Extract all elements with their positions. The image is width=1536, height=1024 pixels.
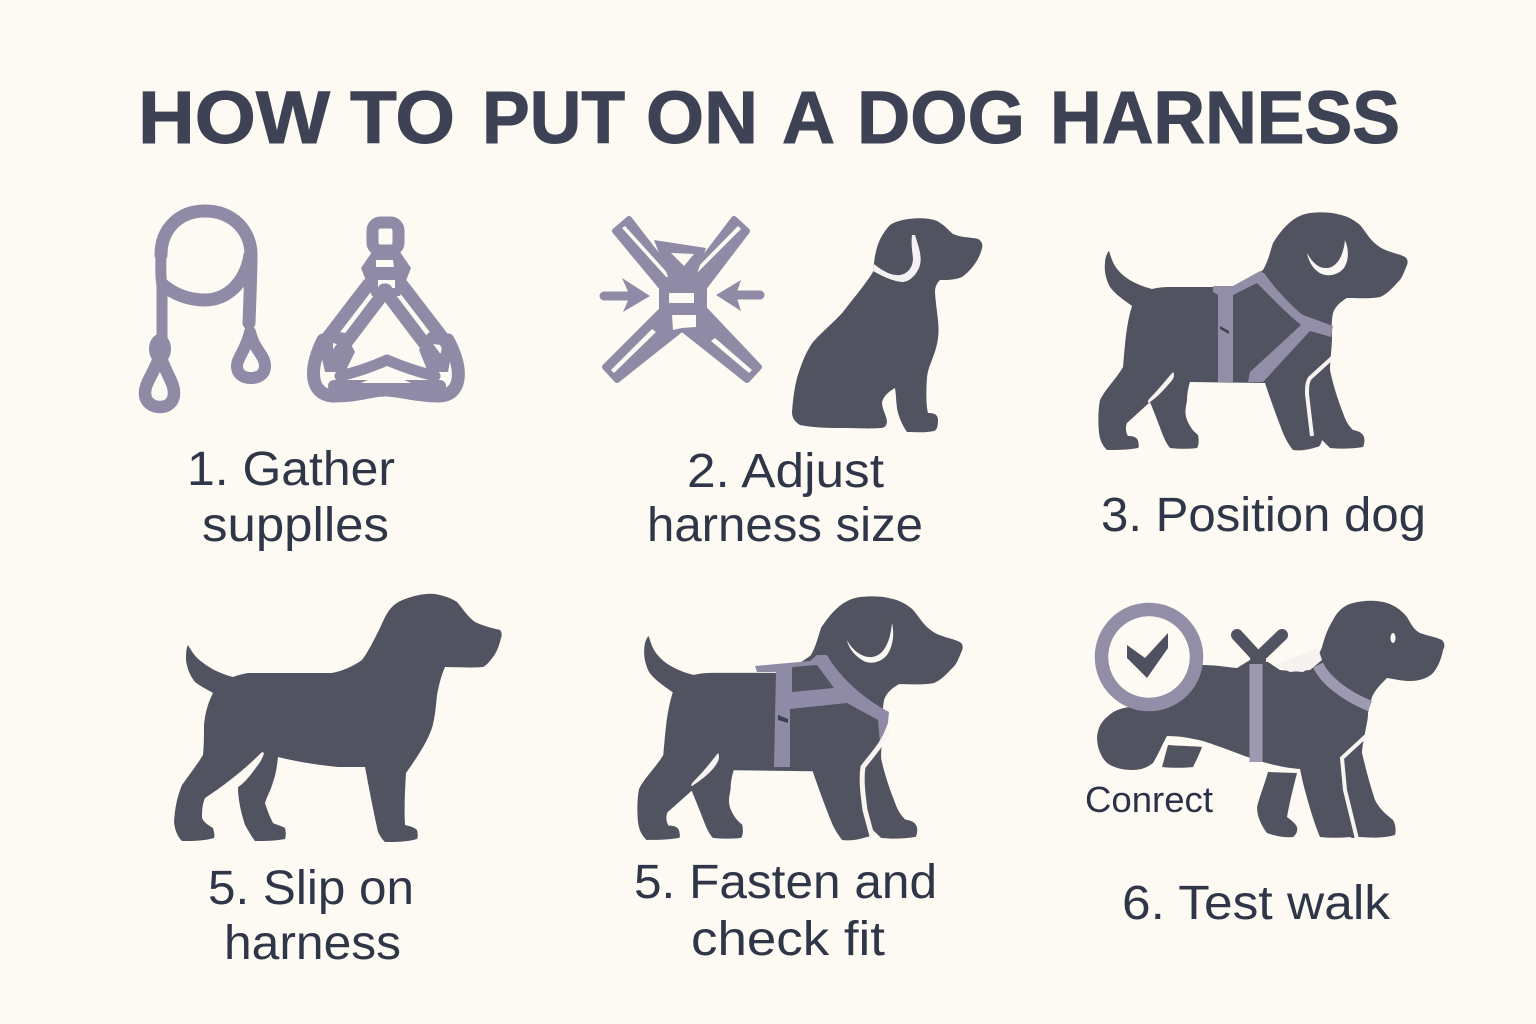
label: step 4: 5. Slip on bbox=[208, 862, 414, 915]
label: step 4 bbox=[208, 862, 414, 970]
label: step 1: supplles bbox=[202, 499, 389, 552]
title: ON bbox=[646, 76, 758, 159]
badge label: Conrect bbox=[1085, 779, 1213, 820]
title bbox=[138, 76, 1400, 159]
icon: walking dog bbox=[1097, 601, 1444, 839]
harness straps bbox=[755, 655, 889, 767]
icon: sitting dog bbox=[792, 218, 982, 432]
icon: standing dog with harness bbox=[1098, 212, 1408, 450]
icon: standing dog with fastened harness bbox=[637, 596, 963, 840]
icon: adjustable harness with arrows bbox=[604, 219, 760, 380]
icon: harness bbox=[314, 222, 458, 396]
title: DOG bbox=[857, 76, 1025, 159]
label: step 5: check fit bbox=[691, 913, 885, 966]
label: step 4: harness bbox=[224, 917, 401, 970]
eye bbox=[1390, 633, 1396, 643]
label: step 3: 3. Position dog bbox=[1101, 489, 1426, 542]
title: PUT bbox=[482, 76, 625, 159]
title: HARNESS bbox=[1050, 76, 1400, 159]
label: step 2: harness size bbox=[647, 499, 923, 552]
harness straps bbox=[1213, 271, 1333, 382]
panel: step 6 test walk bbox=[1085, 601, 1444, 930]
label: step 1 bbox=[187, 443, 395, 552]
label: step 5: 5. Fasten and bbox=[634, 856, 937, 909]
label: step 5 bbox=[634, 856, 937, 966]
label: step 2: 2. Adjust bbox=[687, 445, 884, 498]
icon: standing dog bbox=[174, 594, 502, 842]
title: TO bbox=[350, 76, 455, 159]
harness straps bbox=[1237, 635, 1370, 762]
panel: step 4 slip on harness bbox=[174, 594, 502, 970]
panel: step 3 position dog bbox=[1098, 212, 1426, 542]
title: A bbox=[782, 76, 835, 159]
label: step 1: 1. Gather bbox=[187, 443, 395, 496]
panel: step 1 gather supplies bbox=[145, 211, 458, 552]
hind stump bbox=[1162, 745, 1202, 768]
icon: check mark badge bbox=[1102, 610, 1196, 704]
title: HOW bbox=[138, 76, 330, 159]
far leg bbox=[1257, 772, 1297, 837]
ear highlight bbox=[1307, 240, 1348, 275]
icon: leash bbox=[145, 211, 265, 407]
label: step 2 bbox=[647, 445, 923, 552]
ear highlight bbox=[847, 623, 893, 663]
panel: step 5 fasten and check fit bbox=[634, 596, 963, 966]
label: step 6: 6. Test walk bbox=[1122, 877, 1391, 930]
panel: step 2 adjust harness size bbox=[604, 218, 982, 552]
